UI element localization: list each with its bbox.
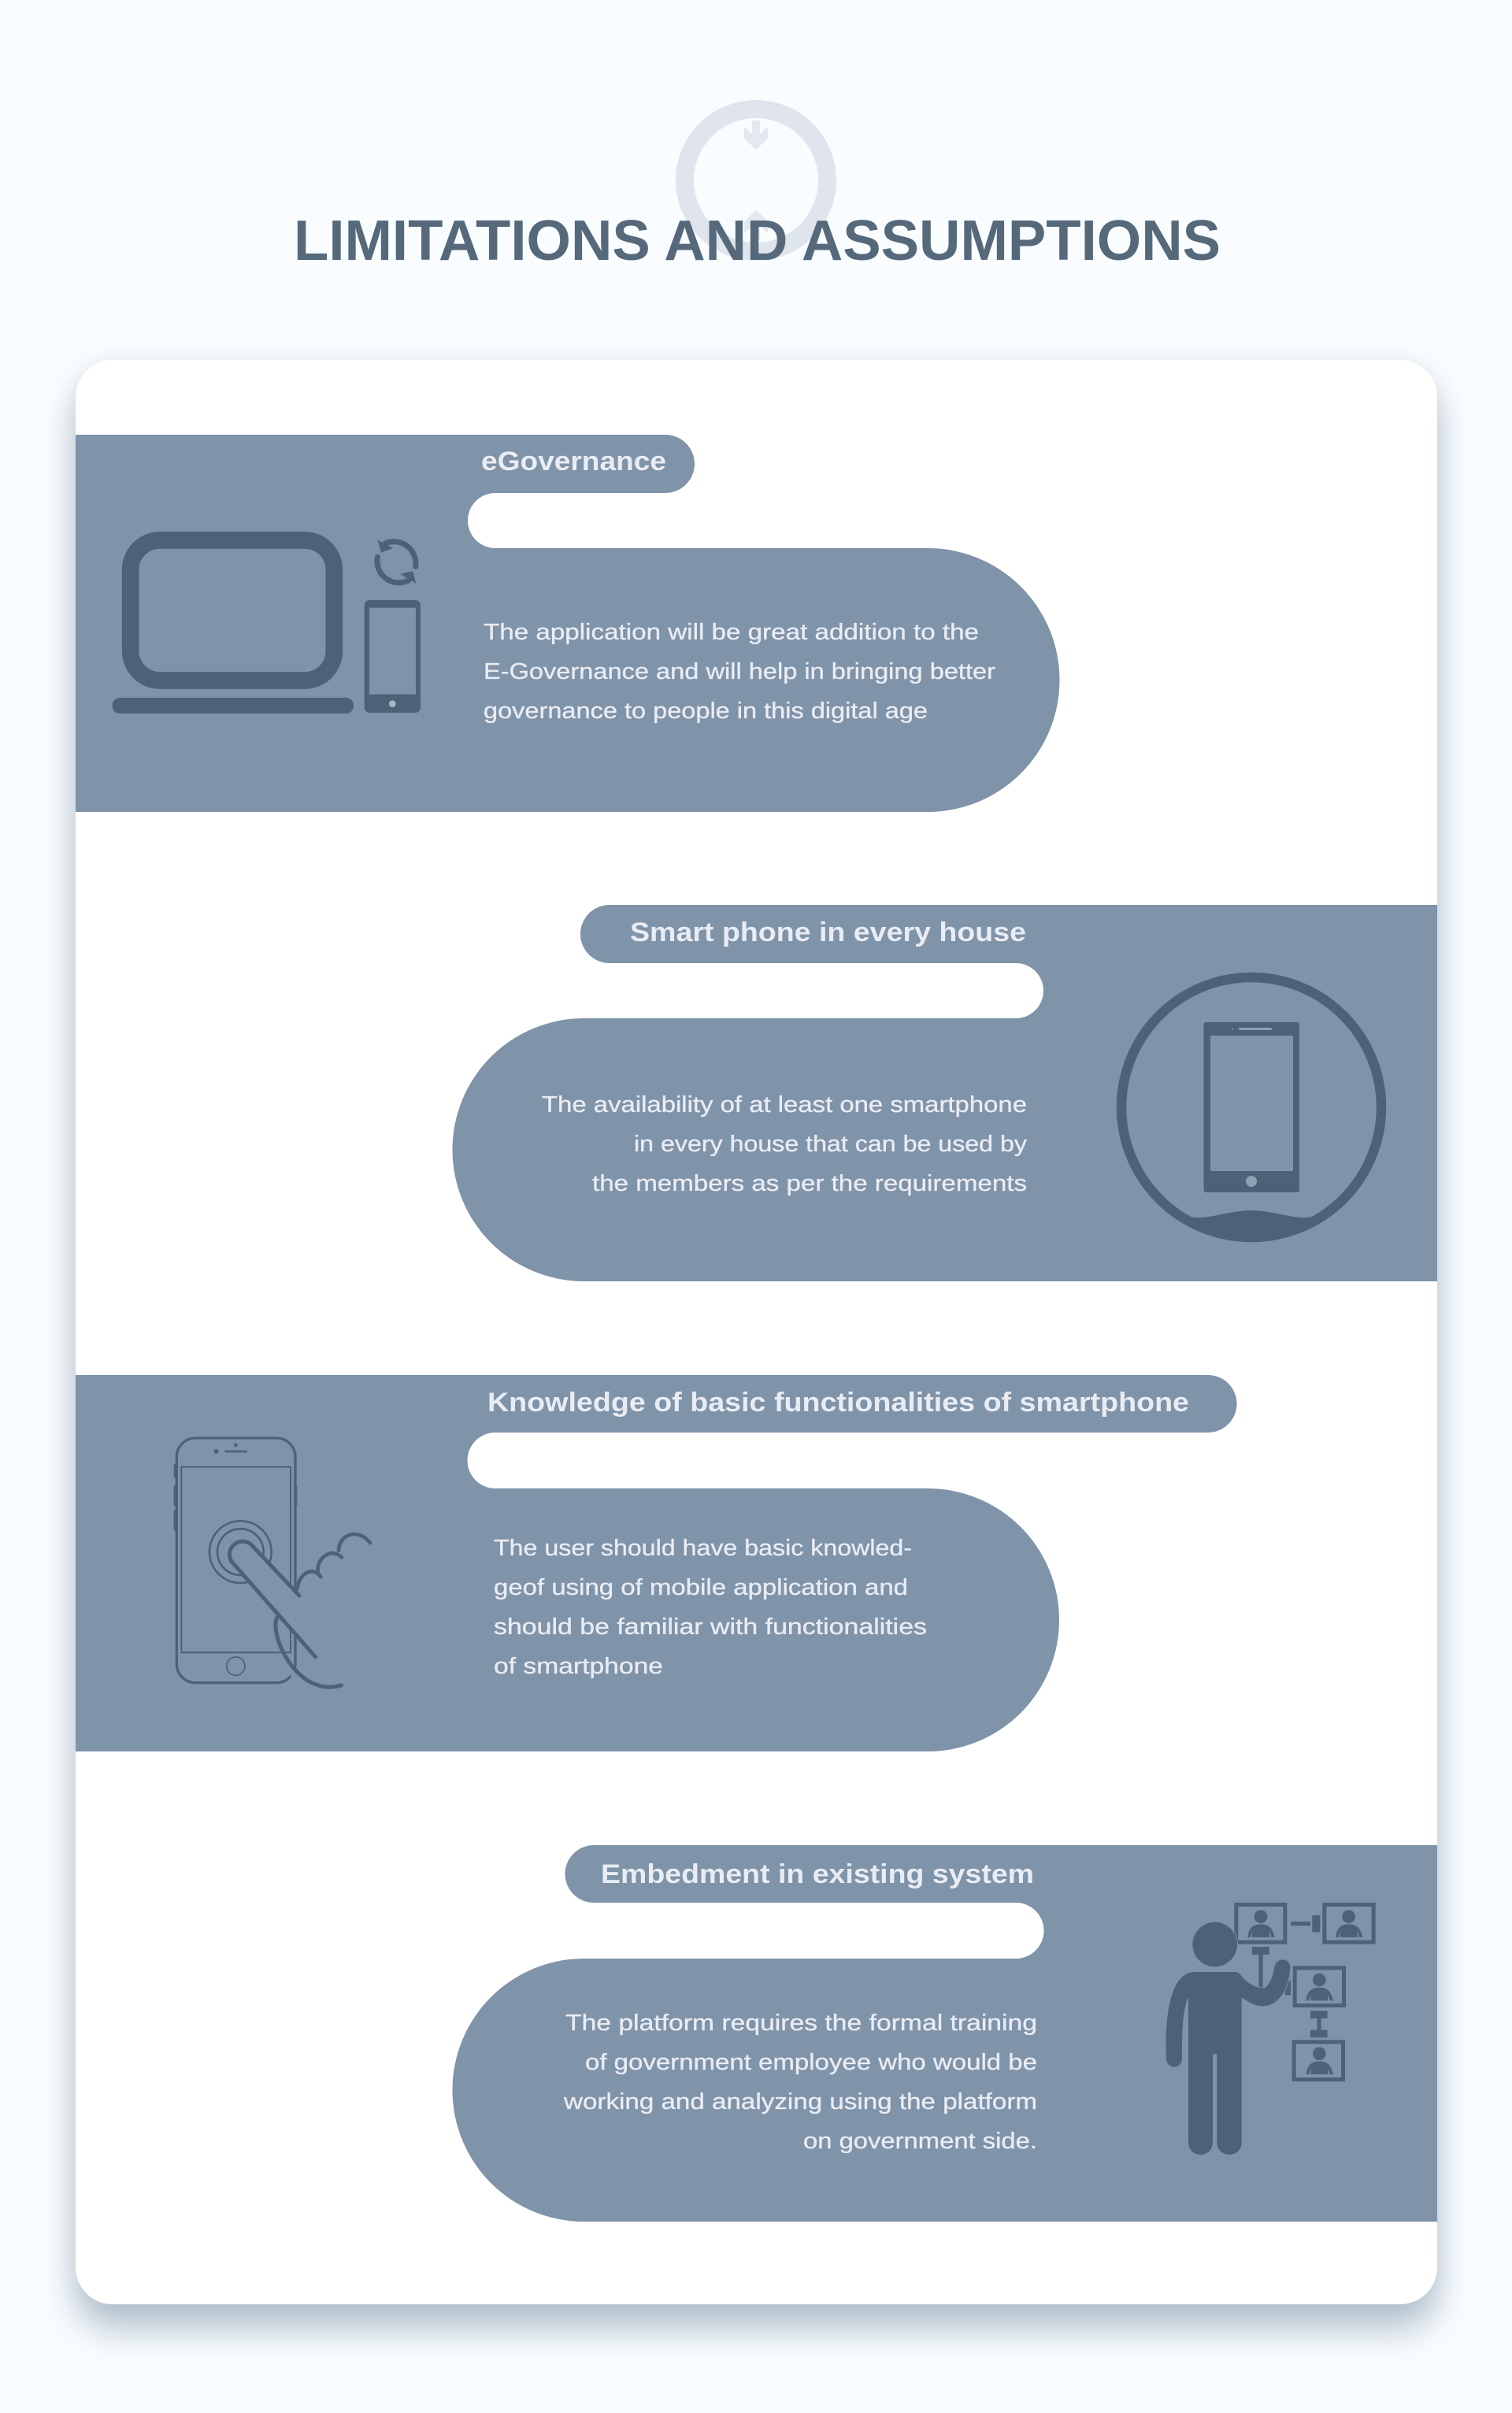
body text: The availability of at least one smartphone [542, 1092, 1027, 1118]
body text [494, 1536, 927, 1679]
heading: Knowledge of basic functionalities of smartphone [487, 1388, 1189, 1418]
icon: finger tapping smartphone [176, 1438, 370, 1703]
band shape [76, 435, 1060, 812]
title: LIMITATIONS AND ASSUMPTIONS [294, 209, 1221, 272]
icon: smartphone in circle [1121, 977, 1381, 1237]
body text: governance to people in this digital age [484, 699, 928, 724]
body text: working and analyzing using the platform [563, 2089, 1037, 2115]
heading: eGovernance [481, 447, 666, 476]
body text: on government side. [803, 2129, 1037, 2154]
panel: eGovernance [76, 435, 1060, 812]
body text: The application will be great addition to the [484, 620, 979, 645]
body text: E-Governance and will help in bringing better [484, 659, 995, 684]
body text: should be familiar with functionalities [494, 1614, 927, 1640]
panel: Embedment in existing system [452, 1845, 1437, 2222]
body text: in every house that can be used by [634, 1132, 1028, 1157]
body text [542, 1092, 1028, 1196]
icon: person pointing at network of people [1166, 1904, 1373, 2155]
body text: of smartphone [494, 1654, 663, 1679]
body text: The user should have basic knowled- [494, 1536, 912, 1561]
body text: of government employee who would be [585, 2050, 1037, 2075]
panel: Smart phone in every house [452, 905, 1437, 1281]
heading: Embedment in existing system [601, 1859, 1034, 1889]
band shape [76, 1375, 1236, 1751]
panel: Knowledge of basic functionalities of smartphone [76, 1375, 1236, 1751]
body text: The platform requires the formal training [565, 2011, 1037, 2036]
band shape [452, 1845, 1437, 2222]
body text [563, 2011, 1037, 2154]
white card panel [76, 360, 1437, 2304]
body text [484, 620, 995, 724]
body text: geof using of mobile application and [494, 1575, 908, 1600]
band shape [452, 905, 1437, 1281]
top ring icon with arrows [685, 109, 827, 252]
heading: Smart phone in every house [630, 917, 1026, 947]
icon: laptop, phone and sync [113, 539, 421, 714]
body text: the members as per the requirements [592, 1171, 1027, 1196]
